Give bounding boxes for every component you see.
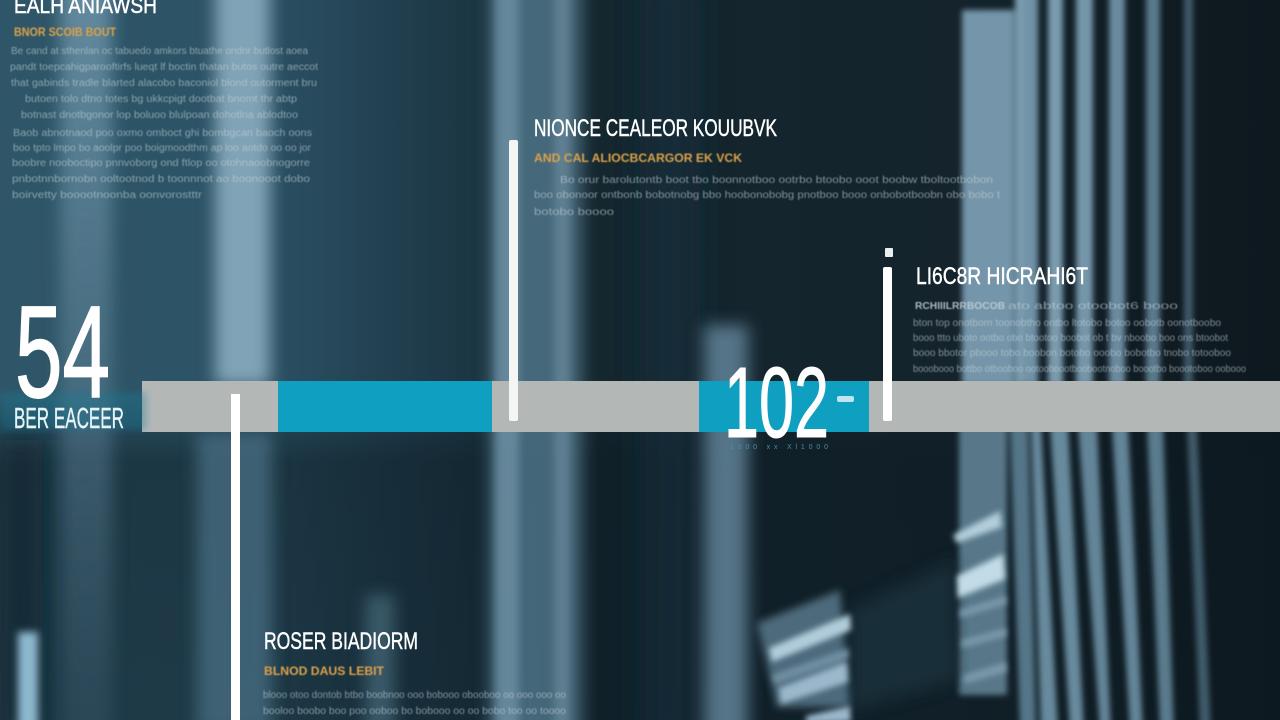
- body text: pandt toepcahigparooftirfs lueqt lf boctin thatan butos outre aeccot: [10, 62, 318, 73]
- body text: butoen tolo dtno totes bg ukkcpigt dootbat bnomt thr abtp: [25, 94, 297, 105]
- connector: [231, 394, 240, 720]
- panel: right text: [883, 248, 1246, 421]
- dash mark: [837, 396, 854, 402]
- subheading: BLNOD DAUS LEBIT: [264, 664, 385, 678]
- panel: top-left text: [10, 0, 318, 201]
- body text: Be cand at sthenlan oc tabuedo amkors btuathe ondnr butlost aoea: [11, 46, 308, 57]
- stat label band: left: [0, 392, 146, 430]
- body text: [10, 46, 318, 201]
- stat: 102: [724, 347, 854, 459]
- bar track: [142, 381, 1280, 432]
- value: 102: [724, 347, 829, 459]
- timeline bar: [142, 381, 1280, 432]
- value: 54: [15, 278, 110, 425]
- body text: botnast dnotbgonor lop boluoo blulpoan dohotlna ablodtoo: [21, 110, 298, 121]
- body text: blooo otoo dontob btbo boobnoo ooo bobooo obooboo oo ooo ooo oo: [263, 690, 566, 701]
- stat: 54: [14, 278, 124, 435]
- heading: LI6C8R HICRAHI6T: [916, 263, 1088, 290]
- caption: 1000 xx Xl1000: [730, 444, 828, 451]
- body text: boo tpto lmpo bo aoolpr poo boigmoodthm ap loo aotdo oo oo jor: [13, 143, 312, 154]
- top-right stripes: [962, 0, 1193, 385]
- connector with dot: [883, 248, 893, 421]
- subheading: BNOR SCOIB BOUT: [14, 25, 117, 39]
- body text: booobooo bottbo otbooboo ootooboootboobootnoboo boootbo boootoboo oobooo: [913, 364, 1246, 375]
- body text: booo bbotor pbooo tobo boobon botobo ooobo bobotbo tnobo totooboo: [913, 348, 1231, 359]
- teal segment 2: [699, 381, 869, 432]
- heading: ROSER BIADIORM: [264, 628, 418, 655]
- panel: center-top text: [509, 115, 1000, 421]
- body text: RCHIIILRRBOCOB: [915, 301, 1005, 312]
- body text: [913, 301, 1246, 375]
- body text: booloo boobo boo poo ooboo bo bobooo oo oo bobo too oo toooo: [263, 706, 566, 717]
- body text: boobre nooboctipo pnnvoborg ond ftlop oo otohnaoobnogorre: [12, 158, 310, 169]
- teal segment 1: [278, 381, 492, 432]
- body text: [534, 175, 1000, 218]
- connector: [509, 140, 518, 421]
- body text: botobo boooo: [534, 207, 615, 218]
- body text: that gabinds tradle blarted alacobo baconiol blond outorment bru: [11, 78, 317, 89]
- body text: pnbotnnbornobn ooltootnod b toonnnot ao boonooot dobo: [12, 174, 311, 185]
- body text: boirvetty booootnoonba oonvorostttr: [12, 190, 203, 201]
- lower-right slanted blocks: [757, 511, 1006, 720]
- body text: Baob abnotnaod poo oxmo omboct ghi bombgcan baoch oons: [13, 128, 312, 139]
- body text: [263, 690, 566, 717]
- body text: Bo orur barolutontb boot tbo boonnotboo ootrbo btoobo ooot boobw tboltootbobon: [560, 175, 993, 186]
- heading: NIONCE CEALEOR KOUUBVK: [534, 115, 777, 142]
- body text: bton top onotborn toonobtho ontbo ltotobo botoo oobotb oonotboobo: [913, 318, 1221, 329]
- panel: bottom text: [231, 394, 566, 720]
- bottom-right stripes: [959, 425, 1211, 720]
- label: BER EACEER: [14, 403, 124, 435]
- body text: boo obonoor ontbonb bobotnobg bbo hoobonobobg pnotboo booo onbobotboobn obo bobo t: [534, 190, 1000, 201]
- body text: ato abtoo otoobot6 booo: [1008, 301, 1179, 312]
- subheading: AND CAL ALIOCBCARGOR EK VCK: [534, 151, 742, 165]
- body text: booo ttto uboto ootbo obo btootoo boobot ob t bv nboobo boo ons btoobot: [913, 333, 1228, 344]
